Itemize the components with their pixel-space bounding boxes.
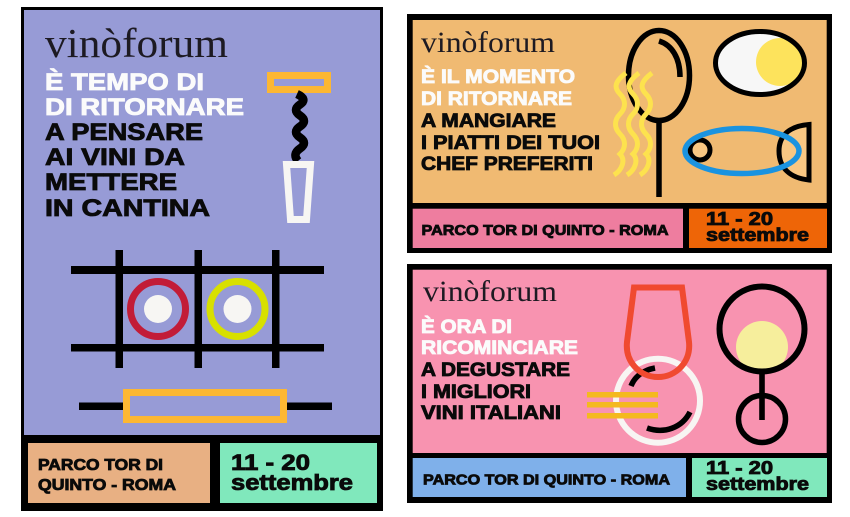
date box: 11 - 20 xyxy=(231,450,310,475)
headline: CHEF PREFERITI xyxy=(421,154,593,175)
headline: DI RITORNARE xyxy=(421,89,572,110)
location box: QUINTO - ROMA xyxy=(38,477,176,494)
headline: È ORA DI xyxy=(421,316,512,338)
panel: food poster xyxy=(407,14,832,253)
headline: RICOMINCIARE xyxy=(421,338,578,359)
date box xyxy=(220,443,377,503)
headline: I PIATTI DEI TUOI xyxy=(421,133,600,154)
panel: wine poster xyxy=(407,264,832,503)
icon: red wine glass xyxy=(627,288,689,377)
location box xyxy=(413,458,686,497)
date box: 11 - 20 xyxy=(706,458,773,478)
icon: rolling pin xyxy=(79,392,332,420)
headline: È IL MOMENTO xyxy=(421,66,575,88)
date box: settembre xyxy=(231,470,353,495)
headline: A DEGUSTARE xyxy=(421,360,570,381)
headline: AI VINI DA xyxy=(45,144,185,171)
logo: vinòforum xyxy=(421,26,555,59)
headline xyxy=(421,316,578,424)
date box: 11 - 20 xyxy=(706,209,773,229)
headline: A MANGIARE xyxy=(421,111,556,132)
icon: round wine glass xyxy=(720,286,804,442)
headline: È TEMPO DI xyxy=(45,68,204,96)
icon: plate and fork xyxy=(587,359,700,443)
icon: pasta xyxy=(614,73,652,175)
date box: settembre xyxy=(706,474,809,494)
panel: corkscrew poster xyxy=(21,7,383,511)
headline: A PENSARE xyxy=(45,119,203,146)
logo: vinòforum xyxy=(45,20,228,66)
date box xyxy=(692,458,827,497)
location box: PARCO TOR DI QUINTO - ROMA xyxy=(423,472,670,488)
headline: VINI ITALIANI xyxy=(421,403,561,424)
date box: settembre xyxy=(706,225,809,245)
headline: METTERE xyxy=(45,169,177,196)
icon: egg xyxy=(716,32,804,94)
location box: PARCO TOR DI QUINTO - ROMA xyxy=(422,222,669,239)
headline xyxy=(421,66,600,175)
headline: I MIGLIORI xyxy=(421,382,531,403)
logo: vinòforum xyxy=(423,275,557,308)
headline: IN CANTINA xyxy=(45,195,210,222)
icon: fish xyxy=(685,124,809,180)
location box xyxy=(28,443,210,503)
location box: PARCO TOR DI xyxy=(38,457,163,474)
headline xyxy=(45,68,244,222)
headline: DI RITORNARE xyxy=(45,94,244,121)
icon: corkscrew xyxy=(270,76,328,220)
date box xyxy=(689,209,827,248)
icon: spoon xyxy=(628,30,690,197)
location box xyxy=(413,209,683,248)
icon: grid with two rings xyxy=(71,250,324,368)
